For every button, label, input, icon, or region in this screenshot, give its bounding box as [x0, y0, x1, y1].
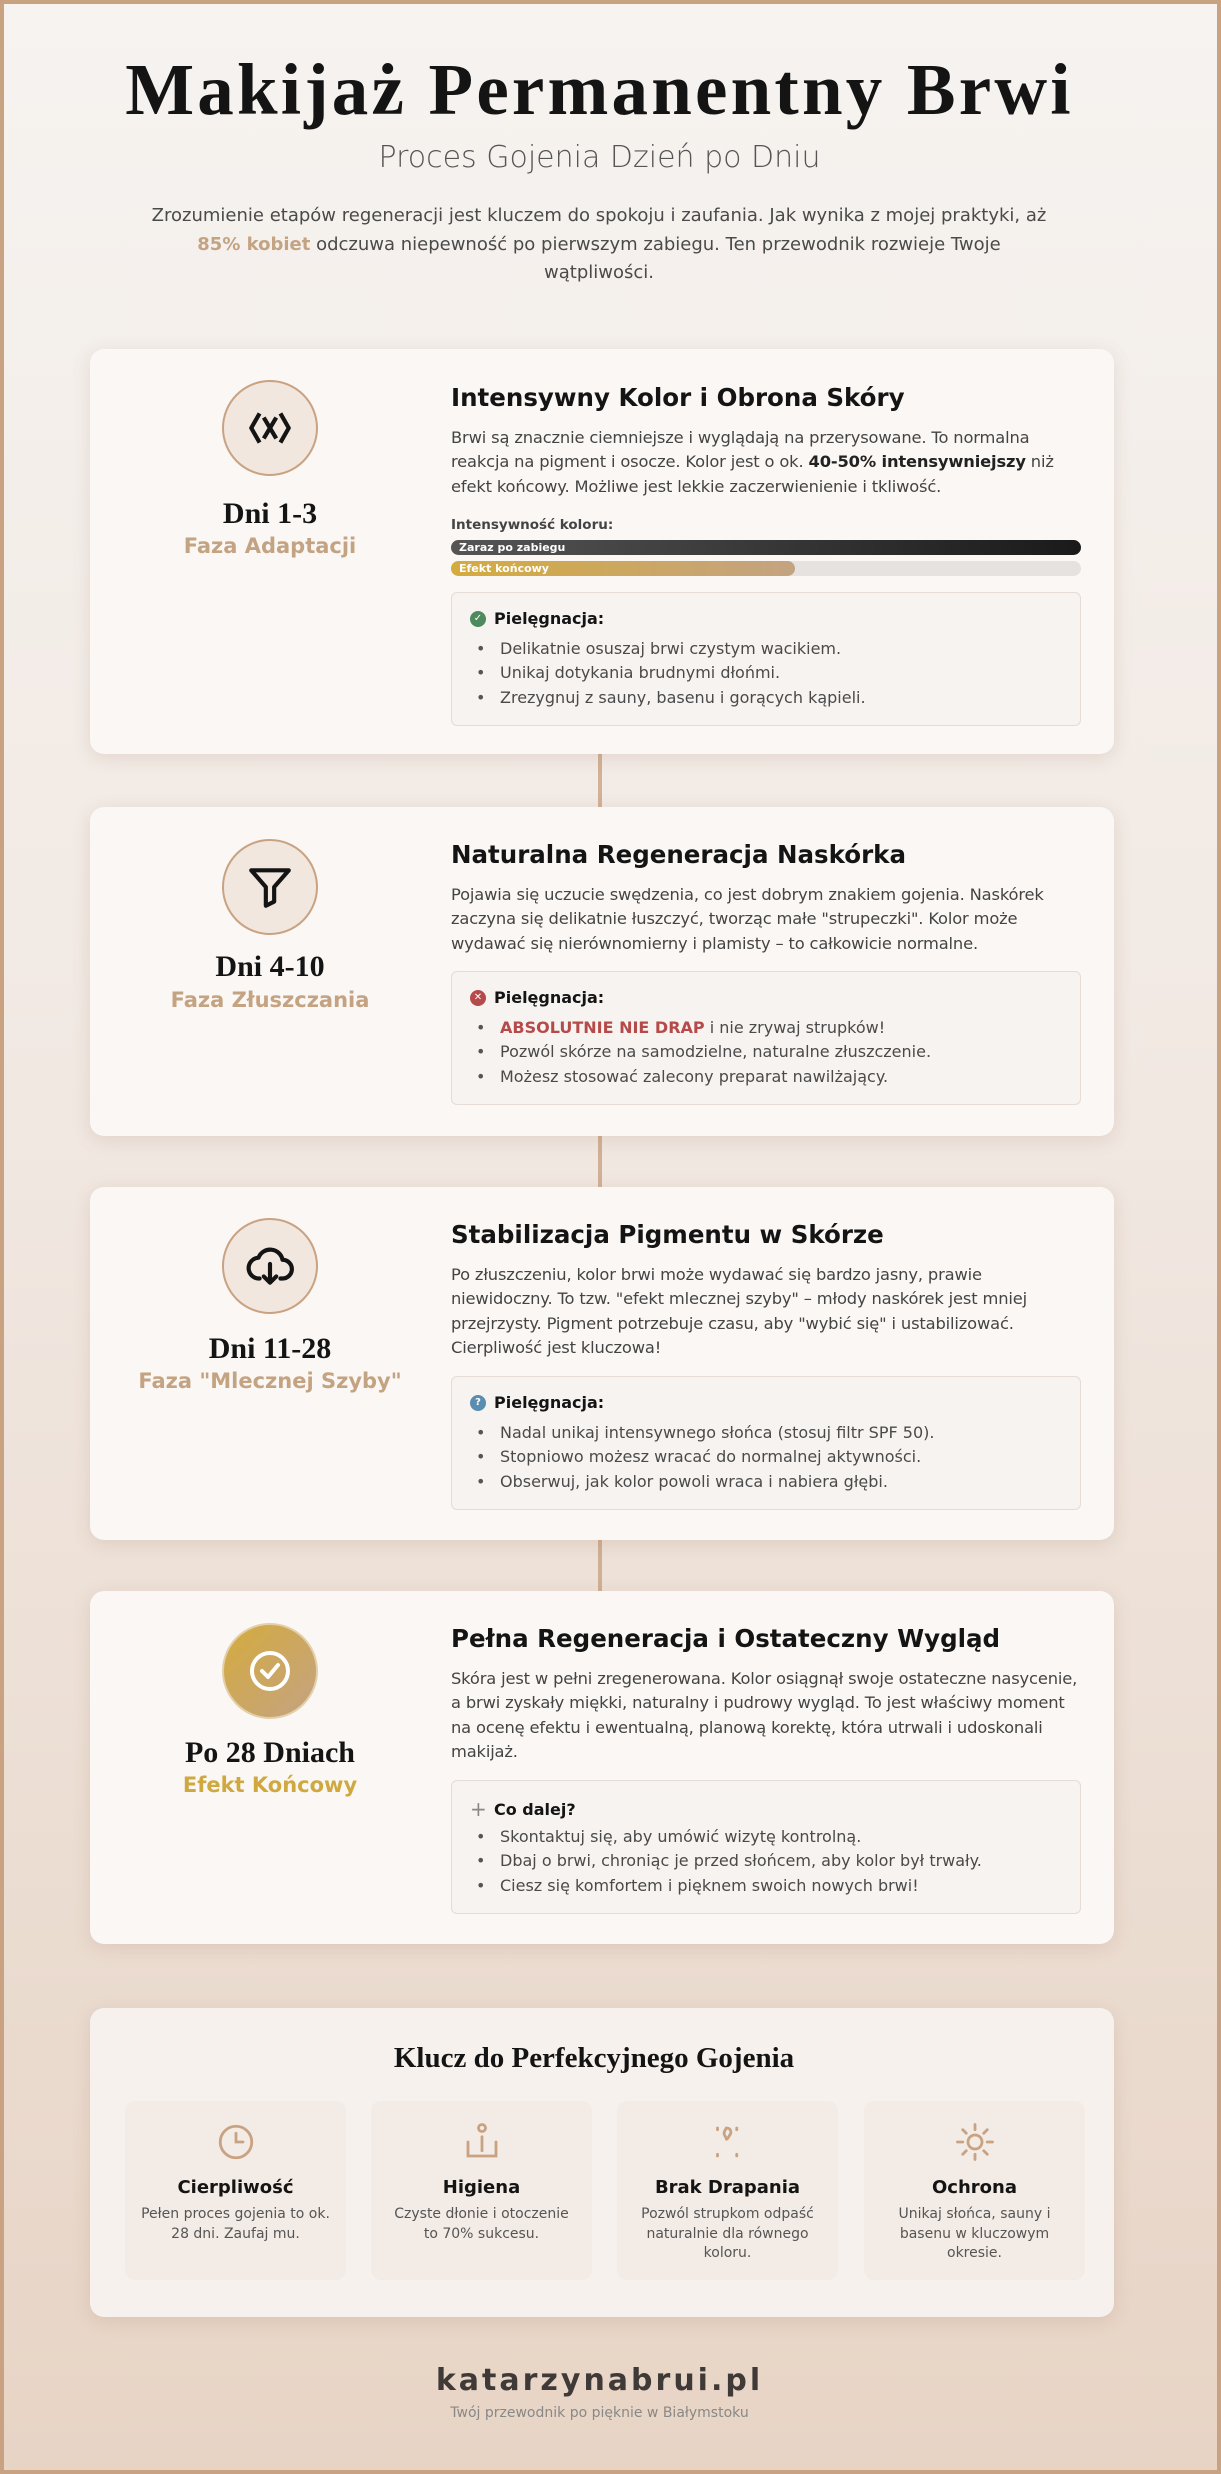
care box: Nadal unikaj intensywnego słońca (stosuj filtr SPF 50).	[500, 1423, 934, 1442]
panel: days 4-10: Faza Złuszczania	[171, 988, 369, 1012]
tip: hygiene	[371, 2101, 592, 2280]
next steps box: Dbaj o brwi, chroniąc je przed słońcem, aby kolor był trwały.	[500, 1851, 982, 1870]
care box: ✓	[474, 613, 482, 624]
panel: after 28 days: Efekt Końcowy	[183, 1773, 357, 1797]
care box: Możesz stosować zalecony preparat nawilżający.	[500, 1067, 888, 1086]
heading: Pełna Regeneracja i Ostateczny Wygląd	[451, 1624, 1000, 1653]
heading: Naturalna Regeneracja Naskórka	[451, 840, 906, 869]
care box: Pozwól skórze na samodzielne, naturalne złuszczenie.	[500, 1042, 931, 1061]
phase label: Dni 1-3	[223, 497, 317, 530]
next steps box: +	[470, 1797, 487, 1821]
care box	[451, 971, 1081, 1105]
tip: no scratching: Pozwól strupkom odpaść naturalnie dla równego koloru.	[641, 2206, 814, 2261]
timeline line	[598, 353, 602, 1943]
panel: key to healing	[90, 2008, 1114, 2317]
care box: Stopniowo możesz wracać do normalnej aktywności.	[500, 1447, 921, 1466]
tip: protection	[864, 2101, 1085, 2280]
care box	[451, 592, 1081, 726]
care box: ?	[475, 1397, 481, 1408]
title: Makijaż Permanentny Brwi	[125, 49, 1074, 130]
intro text: Zrozumienie etapów regeneracji jest kluczem do spokoju i zaufania. Jak wynika z mojej praktyki, aż 85% kobiet odczuwa niepewność po pierwszym zabiegu. Ten przewodnik rozwieje Twoje wątpliwości.	[152, 205, 1046, 283]
tip: no scratching	[617, 2101, 838, 2280]
heading: Intensywny Kolor i Obrona Skóry	[451, 383, 905, 412]
tip: protection: Unikaj słońca, sauny i basenu w kluczowym okresie.	[899, 2206, 1050, 2261]
tip: no scratching: Brak Drapania	[655, 2177, 800, 2198]
phase label: Dni 4-10	[215, 950, 325, 983]
description: Pojawia się uczucie swędzenia, co jest dobrym znakiem gojenia. Naskórek zaczyna się delikatnie łuszczyć, tworząc małe "strupeczki". Kolor może wydawać się nierównomierny i plamisty – to całkowicie normalne.	[451, 885, 1044, 953]
care box: Pielęgnacja:	[494, 1393, 604, 1412]
next steps box: Ciesz się komfortem i pięknem swoich nowych brwi!	[500, 1876, 919, 1895]
care box: Delikatnie osuszaj brwi czystym wacikiem.	[500, 639, 841, 658]
panel: days 11-28: Faza "Mlecznej Szyby"	[138, 1369, 402, 1393]
footer tagline: Twój przewodnik po pięknie w Białymstoku	[450, 2405, 749, 2421]
panel: after 28 days	[90, 1591, 1114, 1944]
phase label: Po 28 Dniach	[185, 1736, 355, 1769]
heading: Stabilizacja Pigmentu w Skórze	[451, 1220, 884, 1249]
bar chart: intensity: Intensywność koloru:	[451, 517, 613, 533]
panel: days 1-3	[90, 349, 1114, 754]
description: Brwi są znacznie ciemniejsze i wyglądają na przerysowane. To normalna reakcja na pigment i osocze. Kolor jest o ok. 40-50% intensywniejszy niż efekt końcowy. Możliwe jest lekkie zaczerwienienie i tkliwość.	[451, 428, 1054, 496]
description: Skóra jest w pełni zregenerowana. Kolor osiągnął swoje ostateczne nasycenie, a brwi zyskały miękki, naturalny i pudrowy wygląd. To jest właściwy moment na ocenę efektu i ewentualną, planową korektę, która utrwali i udoskonali makijaż.	[451, 1669, 1077, 1761]
tip: hygiene: Czyste dłonie i otoczenie to 70% sukcesu.	[394, 2206, 569, 2242]
next steps box	[451, 1780, 1081, 1914]
panel: days 4-10	[90, 807, 1114, 1136]
tip: patience	[125, 2101, 346, 2280]
care box: Obserwuj, jak kolor powoli wraca i nabiera głębi.	[500, 1472, 888, 1491]
tip: patience: Cierpliwość	[177, 2177, 294, 2198]
icon: funnel	[222, 839, 318, 935]
next steps box: Skontaktuj się, aby umówić wizytę kontrolną.	[500, 1827, 861, 1846]
care box: Unikaj dotykania brudnymi dłońmi.	[500, 663, 780, 682]
care box: Pielęgnacja:	[494, 988, 604, 1007]
phase label: Dni 11-28	[209, 1332, 331, 1365]
care box: Zrezygnuj z sauny, basenu i gorących kąpieli.	[500, 688, 866, 707]
panel: days 11-28	[90, 1187, 1114, 1540]
tip: patience: Pełen proces gojenia to ok. 28 dni. Zaufaj mu.	[141, 2206, 330, 2242]
care box: ABSOLUTNIE NIE DRAP i nie zrywaj strupków!	[500, 1018, 885, 1037]
heading: Klucz do Perfekcyjnego Gojenia	[394, 2042, 794, 2074]
next steps box: Co dalej?	[494, 1800, 576, 1818]
care box	[451, 1376, 1081, 1510]
bar chart: intensity	[451, 517, 1081, 576]
icon: check gold	[222, 1623, 318, 1719]
icon: layers	[222, 380, 318, 476]
bar chart: intensity: Zaraz po zabiegu	[459, 541, 565, 554]
footer brand: katarzynabrui.pl	[436, 2363, 763, 2398]
tip: hygiene: Higiena	[443, 2177, 520, 2198]
icon: cloud download	[222, 1218, 318, 1314]
care box: Pielęgnacja:	[494, 609, 604, 628]
bar chart: intensity: Efekt końcowy	[459, 562, 549, 575]
description: Po złuszczeniu, kolor brwi może wydawać się bardzo jasny, prawie niewidoczny. To tzw. "efekt mlecznej szyby" – młody naskórek jest mniej przejrzysty. Pigment potrzebuje czasu, aby "wybić się" i ustabilizować. Cierpliwość jest kluczowa!	[451, 1265, 1027, 1357]
tip: protection: Ochrona	[932, 2177, 1017, 2198]
panel: days 1-3: Faza Adaptacji	[184, 534, 356, 558]
care box: ✕	[474, 992, 482, 1003]
subtitle: Proces Gojenia Dzień po Dniu	[379, 140, 820, 175]
